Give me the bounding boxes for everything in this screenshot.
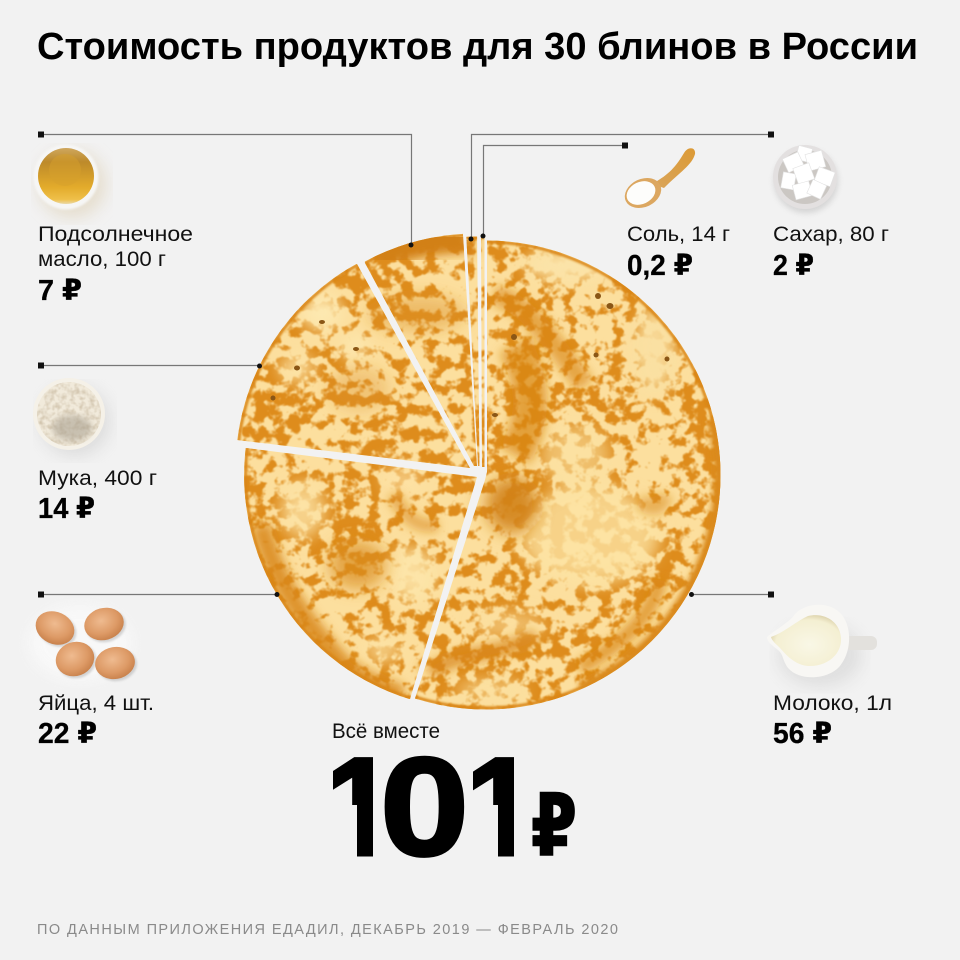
total: all together: 1 <box>321 728 399 885</box>
leader line: flour <box>38 362 262 368</box>
slice: eggs <box>233 230 723 720</box>
label: salt: Соль, 14 г <box>627 222 730 246</box>
slice: milk <box>240 230 730 720</box>
icon: oil cup <box>34 144 106 218</box>
label: eggs: Яйца, 4 шт. <box>38 691 154 715</box>
label: eggs <box>38 691 154 750</box>
total: all together <box>333 724 575 858</box>
icon: salt spoon <box>620 148 695 214</box>
label: salt: 0,2 ₽ <box>627 250 693 282</box>
slice: flour <box>237 244 477 696</box>
label: sugar <box>773 222 889 282</box>
title: Стоимость продуктов для 30 блинов в России <box>37 26 918 68</box>
label: sugar: 2 ₽ <box>773 250 814 282</box>
leader line: salt <box>480 142 628 238</box>
label: sunflower oil: масло, 100 г <box>38 247 166 271</box>
icon: milk jug <box>767 605 877 687</box>
label: sugar: Сахар, 80 г <box>773 222 889 246</box>
label: sunflower oil: 7 ₽ <box>38 275 82 307</box>
label: sunflower oil <box>38 222 193 307</box>
label: salt <box>627 222 730 282</box>
icon: flour bowl <box>33 378 110 456</box>
leader line: milk <box>689 592 774 598</box>
total: all together: Всё вместе <box>332 719 440 743</box>
total: all together: 1 <box>462 728 540 885</box>
total: all together: 0 <box>380 728 469 885</box>
label: milk: 56 ₽ <box>773 718 832 750</box>
total: all together: ₽ <box>531 778 577 874</box>
leader line: eggs <box>38 592 280 598</box>
label: eggs: 22 ₽ <box>38 718 97 750</box>
label: sunflower oil: Подсолнечное <box>38 222 193 246</box>
leader line: sunflower oil <box>38 132 414 248</box>
pancake pie chart <box>224 223 730 720</box>
label: flour <box>38 466 157 525</box>
slice: salt <box>481 238 484 467</box>
label: milk <box>773 691 892 750</box>
label: milk: Молоко, 1л <box>773 691 892 715</box>
leader line: sugar <box>468 132 774 242</box>
icon: eggs <box>28 603 139 684</box>
label: flour: Мука, 400 г <box>38 466 157 490</box>
slice: sunflower oil <box>257 234 480 466</box>
label: flour: 14 ₽ <box>38 493 95 525</box>
slice: sugar <box>466 236 480 466</box>
icon: sugar bowl <box>773 145 838 213</box>
source note: ПО ДАННЫМ ПРИЛОЖЕНИЯ ЕДАДИЛ, ДЕКАБРЬ 2019 — ФЕВРАЛЬ 2020 <box>37 922 618 938</box>
